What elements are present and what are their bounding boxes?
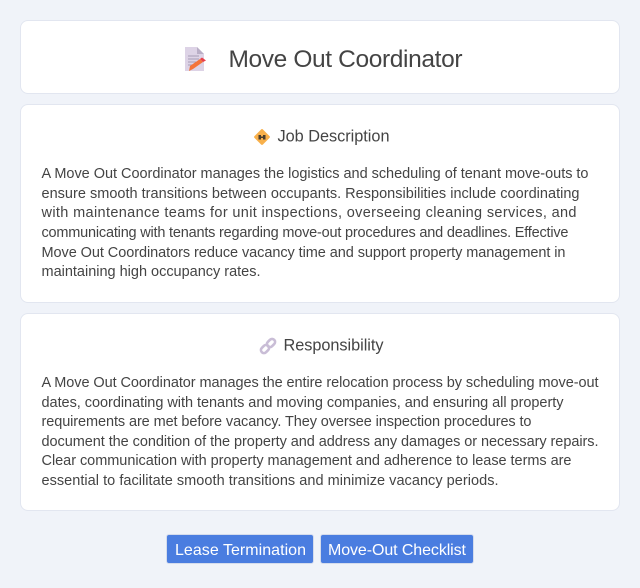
text: responsibility body: document the condition of the property and address any damages or necessary repairs. [42,434,598,450]
heading: title: Move Out Coordinator [228,46,462,73]
text: responsibility body: dates, coordinating with tenants and moving companies, and ensuring all property [42,395,564,411]
text: job description body: ensure smooth transitions between occupants. Responsibilities include coordinating [42,186,580,202]
panel: job description [20,104,620,303]
text: responsibility body [42,375,598,489]
button: lease termination: Lease Termination [175,542,306,559]
button: move-out checklist: Move-Out Checklist [328,542,467,559]
text: job description body: maintaining high occupancy rates. [42,264,260,280]
text: job description body: communicating with tenants regarding move-out procedures and deadlines. Effective [42,225,568,241]
heading: job description: Job Description [278,128,390,146]
button: lease termination [166,534,314,564]
text: job description body: Move Out Coordinators reduce vacancy time and support property management in [42,245,566,261]
text: responsibility body: essential to facilitate smooth transitions and minimize vacancy periods. [42,473,498,489]
text: responsibility body: Clear communication with property management and adherence to lease terms are [42,453,572,469]
icon: orange diamond [254,129,270,145]
text: responsibility body: requirements are met before vacancy. They oversee inspection procedures to [42,414,532,430]
icon: document with pencil [185,47,206,71]
text: job description body: with maintenance teams for unit inspections, overseeing cleaning services, and [40,205,576,221]
button: move-out checklist [320,534,474,564]
text: job description body [40,166,588,280]
heading: responsibility: Responsibility [284,336,384,354]
panel: responsibility [20,313,620,511]
icon: link [260,338,276,354]
text: responsibility body: A Move Out Coordinator manages the entire relocation process by scheduling move-out [42,375,598,391]
panel: title [20,20,620,94]
text: job description body: A Move Out Coordinator manages the logistics and scheduling of tenant move-outs to [42,166,588,182]
